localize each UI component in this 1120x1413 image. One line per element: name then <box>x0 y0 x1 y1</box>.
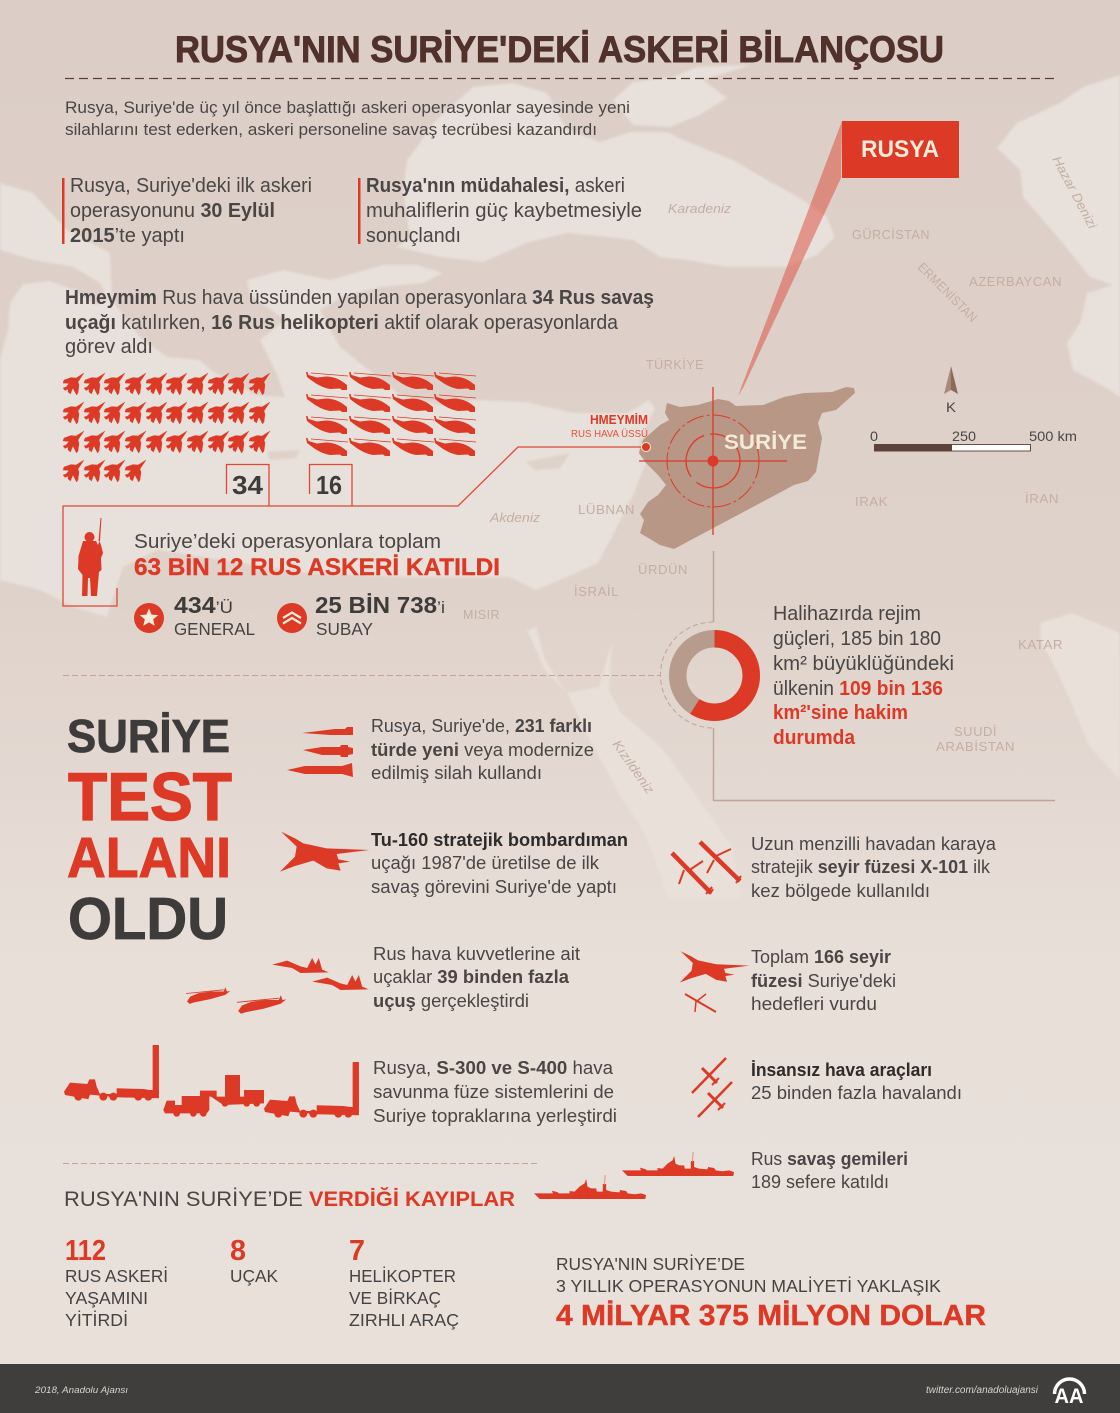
text block: 39 thousand flights: uçuş gerçekleştirdi <box>373 991 529 1011</box>
map labels: İSRAİL <box>574 584 619 599</box>
intro text <box>65 99 630 139</box>
map labels: AZERBAYCAN <box>969 274 1062 289</box>
scale bar: 250 <box>952 428 976 444</box>
text block: Russian intervention: sonuçlandı <box>366 225 461 247</box>
stat: 7 helicopters: HELİKOPTER <box>349 1266 456 1286</box>
map labels: Hazar Denizi <box>1049 153 1101 232</box>
text block: S-300 and S-400: Rusya, S-300 ve S-400 hava <box>373 1058 614 1078</box>
map labels: Akdeniz <box>489 510 541 525</box>
icon: missiles <box>287 727 353 777</box>
icon: warships <box>534 1152 734 1199</box>
text block: 39 thousand flights: uçaklar 39 binden fazla <box>373 967 570 987</box>
intro text: Rusya, Suriye'de üç yıl önce başlattığı askeri operasyonlar sayesinde yeni <box>65 99 630 117</box>
text block: 166 cruise missiles: Toplam 166 seyir <box>751 947 891 967</box>
text block: 231 weapons: Rusya, Suriye'de, 231 farklı <box>371 716 592 736</box>
icon: Tu-160 bomber <box>280 832 369 872</box>
map labels: IRAK <box>855 494 888 509</box>
stat: officers <box>277 592 445 639</box>
stat: 7 helicopters: VE BİRKAÇ <box>349 1288 441 1308</box>
Azov Sea <box>613 65 750 127</box>
section divider <box>63 674 660 676</box>
logo: Anadolu Ajansı: AA <box>1054 1385 1084 1408</box>
icon array: 34 jets <box>63 373 270 482</box>
text block: 231 weapons <box>371 716 594 783</box>
footer: twitter.com/anadoluajansi <box>926 1385 1039 1396</box>
heading: losses: RUSYA'NIN SURİYE’DE VERDİĞİ KAYIPLAR <box>64 1187 515 1211</box>
Crete and Cyprus <box>267 450 570 470</box>
text block: warships: Rus savaş gemileri <box>751 1149 908 1169</box>
scale bar: 0 <box>870 428 878 444</box>
text block: 166 cruise missiles <box>751 947 896 1014</box>
map labels: GÜRCİSTAN <box>852 227 930 242</box>
map labels: ERMENİSTAN <box>915 260 981 325</box>
text block: 166 cruise missiles: füzesi Suriye'deki <box>751 971 896 991</box>
scale bar <box>870 428 1077 452</box>
text block: 166 cruise missiles: hedefleri vurdu <box>751 994 877 1014</box>
map labels: SUUDİ <box>954 724 997 739</box>
section divider <box>63 1162 538 1164</box>
stat: 112 soldiers: YAŞAMINI <box>65 1288 148 1308</box>
label: Hmeymim air base: RUS HAVA ÜSSÜ <box>571 428 648 440</box>
stat: 112 soldiers: YİTİRDİ <box>65 1310 128 1330</box>
text block: territory control <box>773 603 954 749</box>
map: Syria highlighted with target <box>639 387 855 549</box>
label: Hmeymim air base <box>571 412 650 452</box>
map labels: KATAR <box>1018 637 1063 652</box>
map labels: TÜRKİYE <box>646 357 704 372</box>
text block: S-300 and S-400 <box>373 1058 617 1126</box>
text block: operation cost: 4 MİLYAR 375 MİLYON DOLAR <box>556 1300 986 1332</box>
map labels: Karadeniz <box>668 201 732 216</box>
stat: officers: SUBAY <box>316 619 373 639</box>
callout: Rusya label with pointer: RUSYA <box>861 136 939 163</box>
text block: drones <box>751 1060 962 1103</box>
text block: operation cost <box>556 1254 986 1332</box>
text block: territory control: güçleri, 185 bin 180 <box>773 628 941 650</box>
stat: generals <box>134 592 255 639</box>
text block: 39 thousand flights <box>373 944 580 1011</box>
intro text: silahlarını test ederken, askeri personeline savaş tecrübesi kazandırdı <box>65 121 597 139</box>
text block: Hmeymim <box>65 287 654 358</box>
stat: 7 helicopters: 7 <box>349 1235 365 1267</box>
map labels: İRAN <box>1025 491 1059 506</box>
Persian Gulf <box>1040 613 1120 780</box>
scale bar: 500 km <box>1029 428 1077 444</box>
icons: aircraft and helicopters <box>186 958 369 1014</box>
title: RUSYA'NIN SURİYE'DEKİ ASKERİ BİLANÇOSU <box>175 28 944 70</box>
icon: soldier <box>78 518 103 596</box>
heading: Suriye test alanı oldu: OLDU <box>68 886 228 952</box>
map labels <box>463 153 1101 797</box>
text block: Tu-160: Tu-160 stratejik bombardıman <box>371 830 628 850</box>
footer: 2018, Anadolu Ajansı <box>34 1385 128 1396</box>
text block: Tu-160: uçağı 1987'de üretilse de ilk <box>371 853 600 873</box>
stat: generals: 434’Ü <box>174 592 233 618</box>
text block: Hmeymim: uçağı katılırken, 16 Rus helikopteri aktif olarak operasyonlarda <box>65 312 619 334</box>
stat: 8 planes: UÇAK <box>230 1266 278 1286</box>
text block: first operation <box>62 175 312 247</box>
counter boxes and connector line: 34 <box>232 470 264 500</box>
stat: 112 soldiers: RUS ASKERİ <box>65 1266 168 1286</box>
map labels: MISIR <box>463 607 500 622</box>
stat: 112 soldiers: 112 <box>65 1235 106 1267</box>
text block: Hmeymim: görev aldı <box>65 336 153 358</box>
callout: Rusya label with pointer <box>738 121 959 396</box>
map: Syria highlighted with target: SURİYE <box>724 431 807 454</box>
text block: operation cost: 3 YILLIK OPERASYONUN MALİYETİ YAKLAŞIK <box>556 1276 941 1296</box>
text block: territory control: ülkenin 109 bin 136 <box>773 678 943 700</box>
map labels: ÜRDÜN <box>638 562 688 577</box>
text block: 231 weapons: türde yeni veya modernize <box>371 740 594 760</box>
footer <box>0 1364 1120 1413</box>
stat: 8 planes: 8 <box>230 1235 246 1267</box>
heading: Suriye test alanı oldu <box>67 710 232 952</box>
text block: territory control: km²'sine hakim <box>773 702 908 724</box>
icon: bomber with cruise missile <box>680 951 749 1012</box>
map labels: Kızıldeniz <box>610 737 658 797</box>
text block: Russian intervention: Rusya'nın müdahalesi, askeri <box>366 175 625 197</box>
stat: officers: 25 BİN 738 ’i <box>315 592 445 618</box>
text block: X-101: Uzun menzilli havadan karaya <box>751 834 997 854</box>
text block: S-300 and S-400: savunma füze sistemlerini de <box>373 1082 614 1102</box>
text block: 231 weapons: edilmiş silah kullandı <box>371 763 542 783</box>
compass <box>944 366 958 415</box>
text block: 39 thousand flights: Rus hava kuvvetlerine ait <box>373 944 580 964</box>
text block: Russian intervention <box>358 175 642 247</box>
text block: operation cost: RUSYA'NIN SURİYE’DE <box>556 1254 745 1274</box>
counter boxes and connector line <box>63 447 645 606</box>
text block: territory control: durumda <box>773 727 856 749</box>
text block: first operation: 2015’te yaptı <box>70 225 185 247</box>
text block: Russian intervention: muhaliflerin güç kaybetmesiyle <box>366 200 642 222</box>
text block: Tu-160 <box>371 830 628 897</box>
text block: drones: 25 binden fazla havalandı <box>751 1083 962 1103</box>
text block: X-101: stratejik seyir füzesi X-101 ilk <box>751 857 991 877</box>
text block: troops total: Suriye’deki operasyonlara toplam <box>134 531 441 553</box>
text block: territory control: km² büyüklüğündeki <box>773 653 954 675</box>
text block: troops total: 63 BİN 12 RUS ASKERİ KATILDI <box>134 554 500 581</box>
icon array: 16 helicopters <box>306 372 476 456</box>
stat: generals: GENERAL <box>174 619 255 639</box>
donut chart: territory <box>678 639 751 712</box>
text block: territory control: Halihazırda rejim <box>773 603 921 625</box>
text block: X-101 <box>751 834 997 901</box>
stat: 112 soldiers <box>65 1235 168 1330</box>
text block: Hmeymim: Hmeymim Rus hava üssünden yapılan operasyonlara 34 Rus savaş <box>65 287 654 309</box>
text block: warships: 189 sefere katıldı <box>751 1172 889 1192</box>
panel frame line <box>660 551 1055 800</box>
heading: Suriye test alanı oldu: SURİYE <box>67 710 230 762</box>
compass: K <box>946 399 957 415</box>
counter boxes and connector line: 16 <box>316 470 342 500</box>
map labels: ARABİSTAN <box>936 739 1015 754</box>
map labels: LÜBNAN <box>578 502 635 517</box>
icon: air defence systems <box>64 1045 359 1118</box>
text block: first operation: Rusya, Suriye'deki ilk askeri <box>70 175 312 197</box>
stat: 8 planes <box>230 1235 278 1286</box>
Red Sea <box>527 627 741 900</box>
Black Sea <box>397 83 835 267</box>
Caspian Sea <box>997 75 1120 397</box>
text block: drones: İnsansız hava araçları <box>751 1060 932 1080</box>
text block: warships <box>751 1149 908 1192</box>
stat: 7 helicopters <box>349 1235 459 1330</box>
text block: troops total <box>134 531 500 581</box>
Mediterranean and Adriatic seas <box>0 183 655 617</box>
text block: X-101: kez bölgede kullanıldı <box>751 881 930 901</box>
text block: first operation: operasyonunu 30 Eylül <box>70 200 275 222</box>
stat: 7 helicopters: ZIRHLI ARAÇ <box>349 1310 459 1330</box>
heading: Suriye test alanı oldu: TEST <box>68 759 232 835</box>
text block: Tu-160: savaş görevini Suriye'de yaptı <box>371 877 617 897</box>
icon: drones <box>692 1058 732 1117</box>
text block: S-300 and S-400: Suriye topraklarına yerleştirdi <box>373 1106 617 1126</box>
label: Hmeymim air base: HMEYMİM <box>590 412 648 427</box>
heading: Suriye test alanı oldu: ALANI <box>67 826 231 890</box>
icon: cruise missiles X-101 <box>672 842 741 894</box>
